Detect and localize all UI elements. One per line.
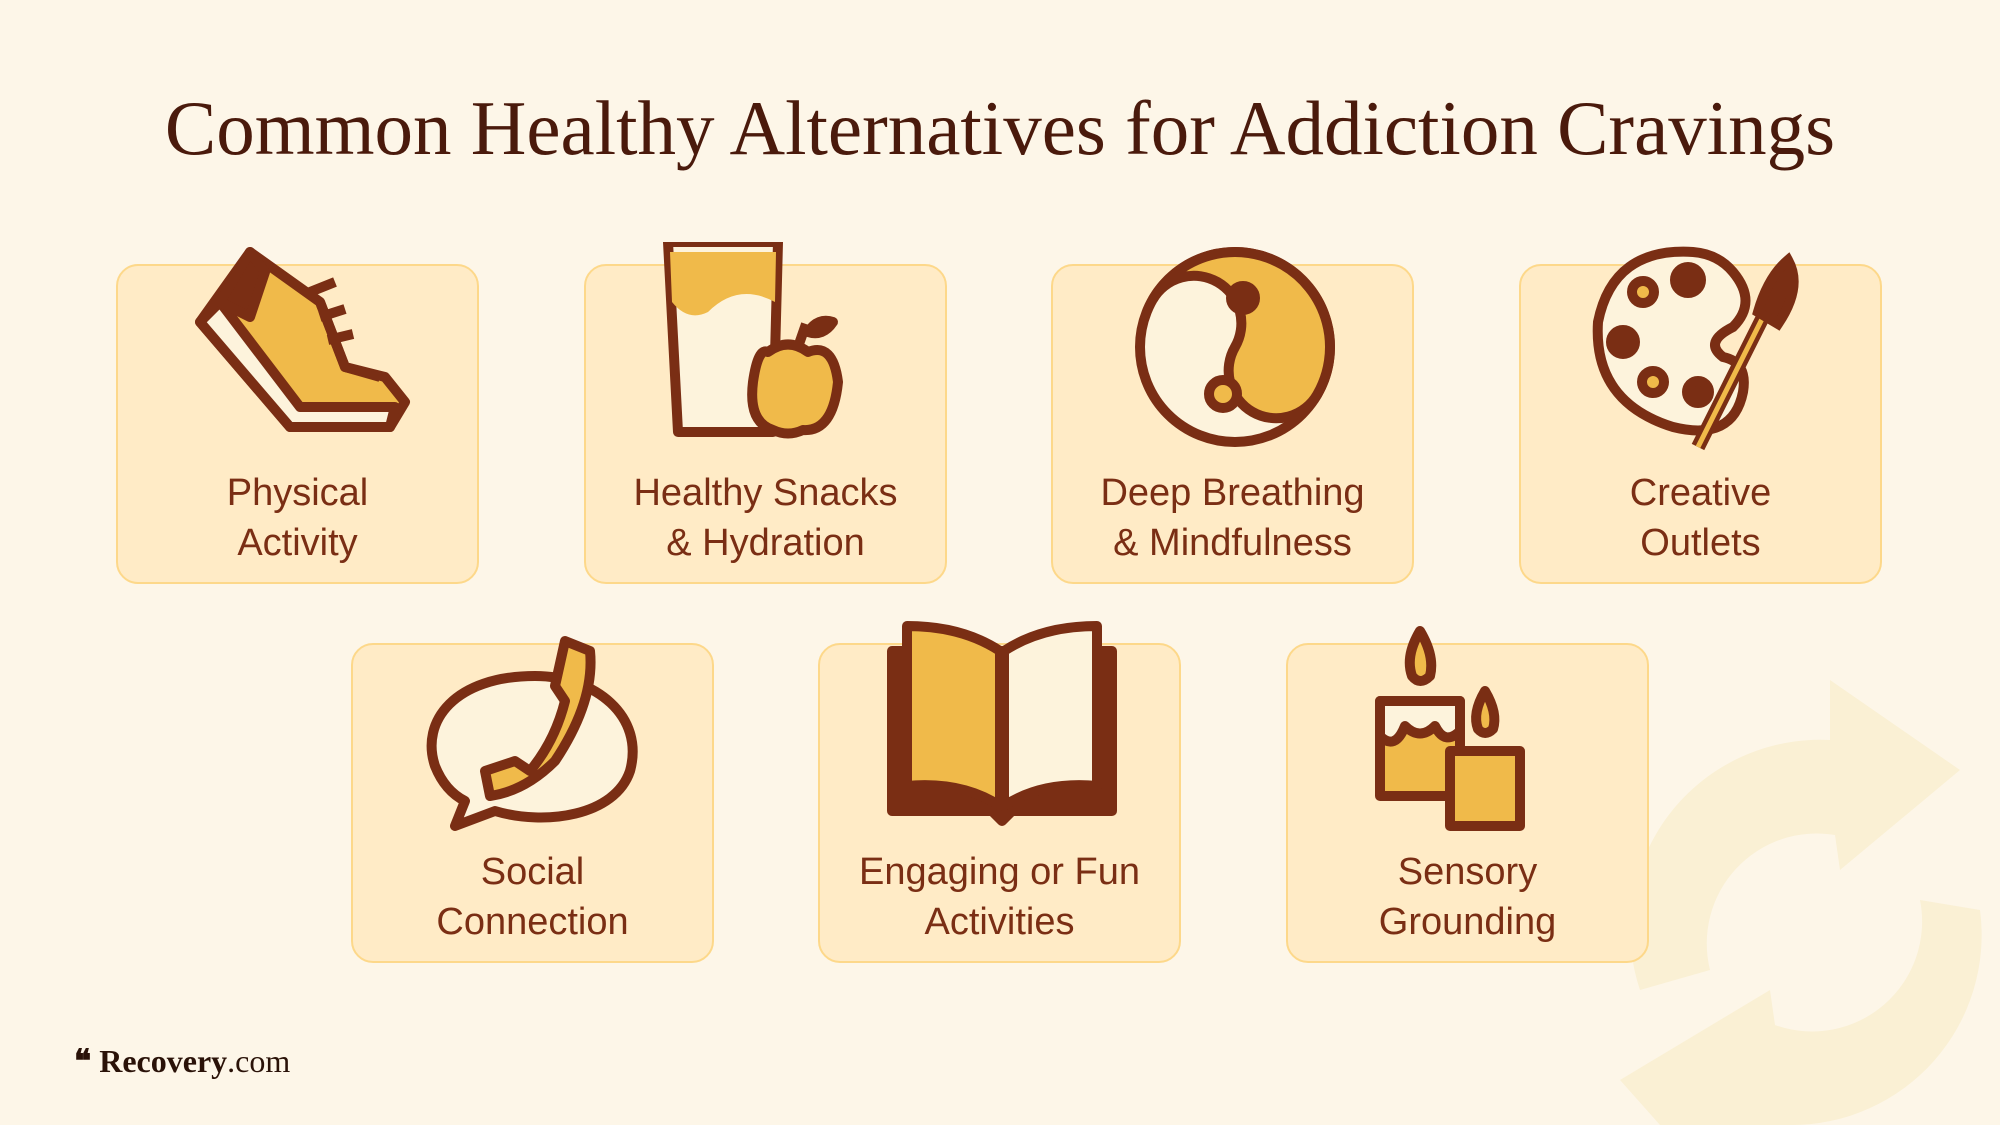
label: & Mindfulness xyxy=(1113,522,1352,564)
card: sensory grounding xyxy=(1286,643,1649,963)
icon: shoe xyxy=(195,247,410,432)
label: Activities xyxy=(925,901,1074,943)
card: healthy snacks xyxy=(584,264,947,584)
card: engaging activities xyxy=(818,643,1181,963)
icon: open book xyxy=(887,621,1117,826)
label xyxy=(633,472,898,564)
label: Physical xyxy=(227,472,368,514)
label xyxy=(1379,851,1556,943)
label: Healthy Snacks xyxy=(633,472,898,514)
icon: yin yang xyxy=(1135,247,1335,447)
icon: speech bubble with phone xyxy=(426,636,638,831)
label: Social xyxy=(481,851,584,893)
label: Activity xyxy=(237,522,358,564)
card: creative outlets xyxy=(1519,264,1882,584)
icon: palette and brush xyxy=(1592,246,1799,450)
label: Connection xyxy=(436,901,629,943)
icon: candles xyxy=(1375,626,1525,831)
label xyxy=(859,851,1140,943)
logo: ❝ Recovery.com xyxy=(74,1043,290,1079)
label: Outlets xyxy=(1640,522,1761,564)
title: Common Healthy Alternatives for Addiction Cravings xyxy=(165,85,1835,171)
background watermark: circular arrows xyxy=(1620,680,1982,1125)
label: Deep Breathing xyxy=(1100,472,1365,514)
label: & Hydration xyxy=(666,522,865,564)
label xyxy=(436,851,629,943)
label: Engaging or Fun xyxy=(859,851,1140,893)
label xyxy=(227,472,368,564)
card: deep breathing xyxy=(1051,264,1414,584)
card: social connection xyxy=(351,643,714,963)
card: physical activity xyxy=(116,264,479,584)
label: Creative xyxy=(1630,472,1771,514)
label: Grounding xyxy=(1379,901,1556,943)
label xyxy=(1630,472,1771,564)
icon: glass and apple xyxy=(663,242,843,438)
label: Sensory xyxy=(1398,851,1537,893)
label xyxy=(1100,472,1365,564)
